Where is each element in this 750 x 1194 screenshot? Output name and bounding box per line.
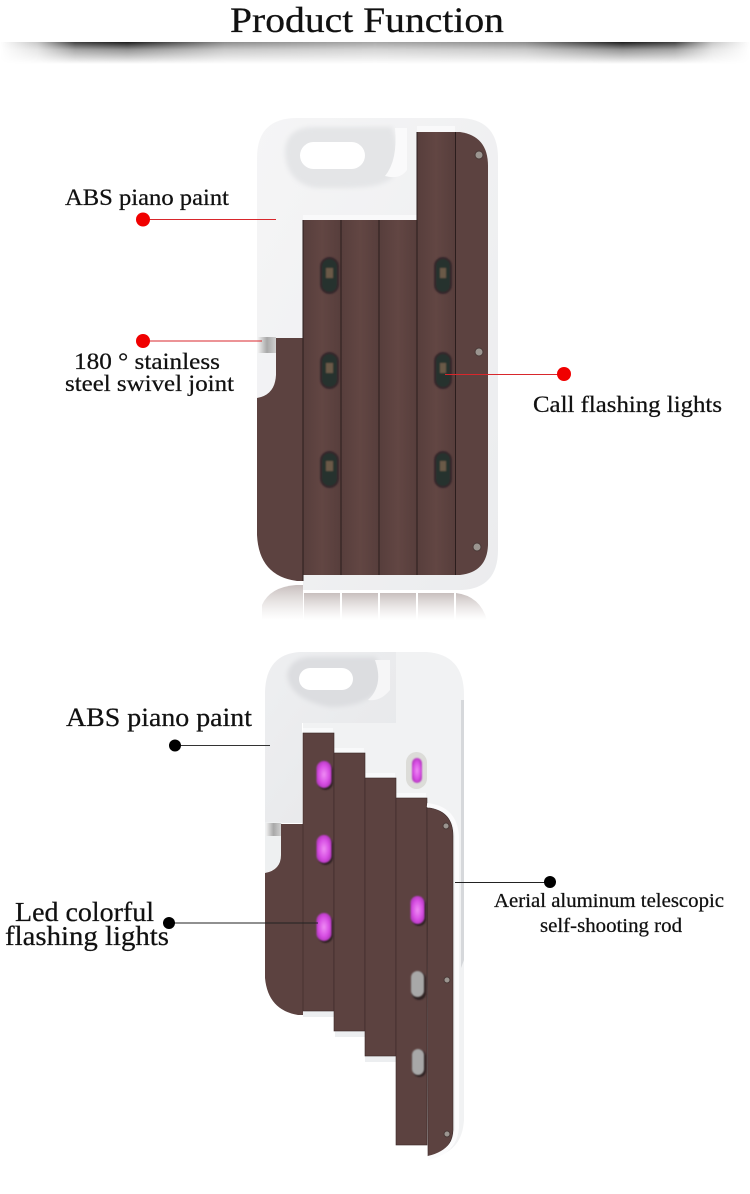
rod strips bbox=[303, 132, 488, 575]
callout: call flashing lights: Call flashing lights bbox=[533, 392, 722, 417]
callout: aerial aluminum telescopic rod: self-shooting rod bbox=[540, 915, 682, 937]
loop recess bbox=[287, 657, 382, 707]
title: Product Function bbox=[230, 0, 504, 40]
white rim around last rod bbox=[427, 805, 457, 1158]
screws bbox=[443, 823, 450, 1137]
header shadow divider bbox=[0, 42, 750, 64]
callout: swivel joint: 180 ° stainless bbox=[74, 349, 220, 374]
loop hole bbox=[299, 668, 353, 690]
top strip of short rods bbox=[303, 215, 417, 220]
front plate bbox=[265, 652, 396, 823]
case body bbox=[257, 118, 498, 590]
callout: ABS piano paint (top) bbox=[65, 185, 276, 226]
case back bbox=[300, 652, 464, 1158]
callout: swivel joint bbox=[65, 334, 262, 396]
loop recess bbox=[285, 127, 398, 188]
window on the white back plate bbox=[406, 752, 427, 789]
callout: aerial aluminum telescopic rod: Aerial aluminum telescopic bbox=[494, 890, 724, 912]
callout: ABS piano paint (top): ABS piano paint bbox=[65, 185, 230, 210]
panel: extended phone case bbox=[265, 652, 464, 1158]
LED lights: purple bbox=[316, 758, 424, 941]
right shaded edge bbox=[461, 700, 464, 968]
white notch bbox=[265, 822, 282, 873]
brown left piece bbox=[265, 824, 303, 1015]
callout: LED colorful flashing lights: Led colorful bbox=[15, 897, 154, 927]
brown left piece bbox=[257, 338, 303, 581]
case reflection bbox=[262, 585, 487, 620]
panel: closed phone case bbox=[257, 118, 498, 590]
callout: swivel joint: steel swivel joint bbox=[65, 371, 235, 396]
loop hole bbox=[300, 142, 365, 169]
screws bbox=[473, 151, 483, 551]
dark LED recesses bbox=[318, 763, 426, 1077]
stepped rod top and bottom caps bbox=[303, 728, 426, 1062]
LED windows bbox=[321, 258, 451, 487]
swivel joint bbox=[258, 337, 276, 353]
callout: ABS piano paint (bottom) bbox=[66, 703, 270, 752]
callout: LED colorful flashing lights bbox=[5, 897, 318, 951]
callout: LED colorful flashing lights: flashing lights bbox=[5, 921, 169, 951]
top strip of extended rod bbox=[417, 126, 455, 132]
swivel joint bbox=[266, 823, 281, 836]
LED windows: off bbox=[411, 971, 424, 1075]
loop highlight bbox=[385, 128, 407, 177]
callout: ABS piano paint (bottom): ABS piano paint bbox=[66, 703, 253, 732]
loop highlight bbox=[368, 660, 390, 700]
callout: call flashing lights bbox=[445, 367, 722, 417]
stepped rods bbox=[303, 733, 453, 1156]
callout: aerial aluminum telescopic rod bbox=[455, 876, 724, 937]
rod seams bbox=[303, 132, 456, 581]
